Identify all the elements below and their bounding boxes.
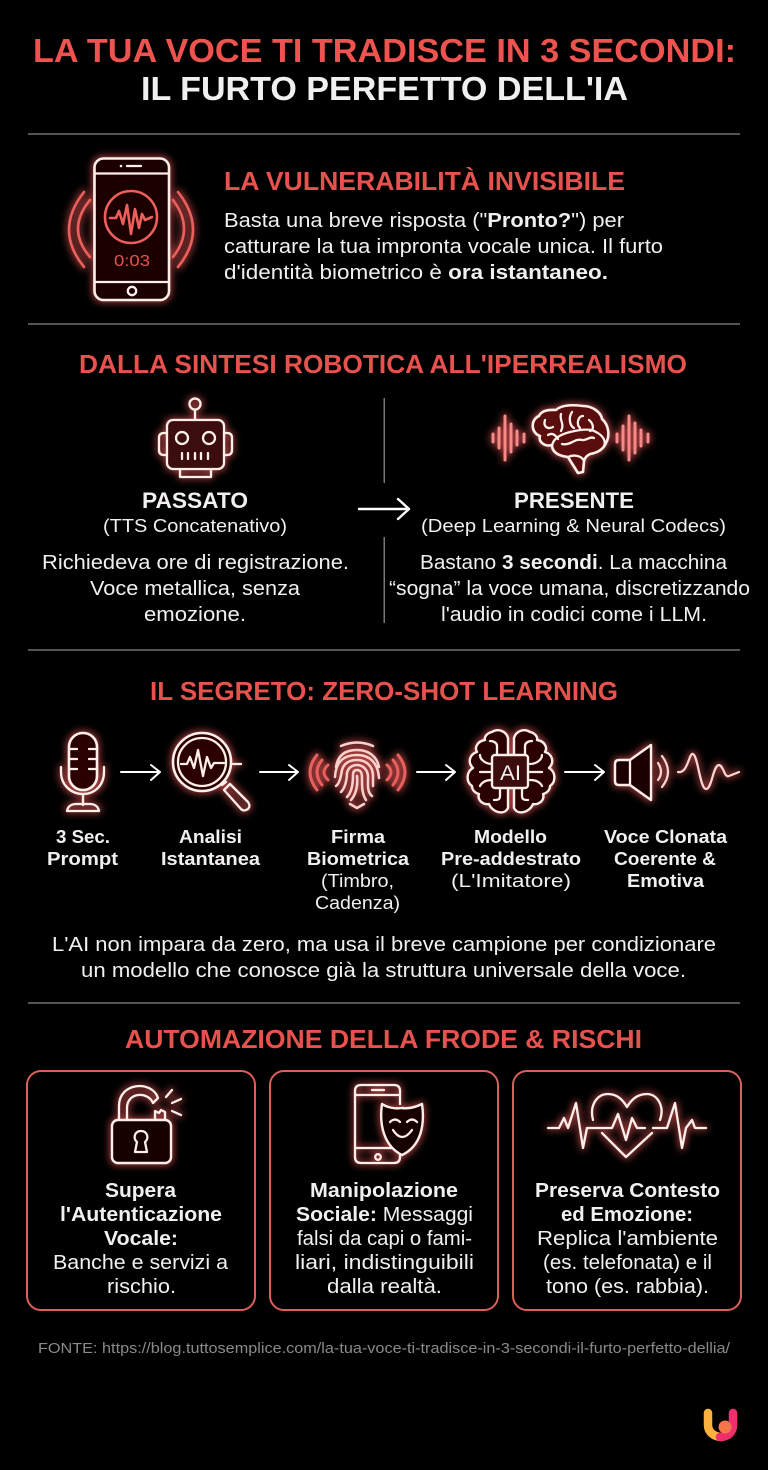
- heading: zero-shot: IL SEGRETO: ZERO-SHOT LEARNING: [150, 676, 618, 706]
- text: vulnerability body: catturare la tua impronta vocale unica. Il furto: [224, 236, 663, 258]
- labels: step 3: Biometrica: [307, 848, 410, 869]
- labels: step 2: Istantanea: [161, 848, 261, 869]
- labels: step 3: [307, 826, 410, 913]
- text: voice authentication: [53, 1180, 229, 1298]
- source line: FONTE: https://blog.tuttosemplice.com/la-tua-voce-ti-tradisce-in-3-secondi-il-furto-perfetto-dellia/: [38, 1340, 731, 1357]
- panel: risks: [27, 1024, 741, 1310]
- labels: step 1: [47, 826, 118, 869]
- text: context and emotion: Preserva Contesto: [535, 1180, 720, 1202]
- text: voice authentication: Supera: [105, 1180, 177, 1202]
- labels: step 1: 3 Sec.: [56, 826, 110, 847]
- text: social manipulation: Sociale: Messaggi: [296, 1204, 473, 1226]
- panel: zero-shot learning: [47, 676, 739, 982]
- text: past: emozione.: [144, 604, 246, 626]
- icon: phone recording: 0:03: [114, 253, 150, 270]
- text: context and emotion: [535, 1180, 720, 1298]
- labels: step 2: [161, 826, 261, 869]
- text: past: [42, 488, 349, 626]
- labels: step 2: Analisi: [179, 826, 242, 847]
- text: voice authentication: rischio.: [107, 1276, 176, 1298]
- labels: step 1: Prompt: [47, 848, 118, 869]
- panel: vulnerability: [69, 158, 663, 300]
- arrow: step 2: [260, 765, 298, 780]
- text: explanation: un modello che conosce già la struttura universale della voce.: [81, 960, 686, 982]
- text: explanation: [52, 934, 716, 982]
- text: past: Richiedeva ore di registrazione.: [42, 552, 349, 574]
- text: present: Bastano 3 secondi. La macchina: [420, 552, 728, 574]
- heading: vulnerability: LA VULNERABILITÀ INVISIBILE: [224, 166, 625, 196]
- text: present: “sogna” la voce umana, discretizzando: [389, 578, 750, 600]
- text: voice authentication: Vocale:: [104, 1228, 178, 1250]
- text: vulnerability body: Basta una breve risposta (" Pronto? ") per: [224, 210, 624, 232]
- icon: heart pulse: [548, 1094, 706, 1157]
- heading: risks: AUTOMAZIONE DELLA FRODE & RISCHI: [125, 1024, 642, 1054]
- icon: fingerprint: [310, 742, 405, 808]
- text: voice authentication: l'Autenticazione: [60, 1204, 222, 1226]
- divider: vertical bottom: [384, 537, 385, 623]
- icon: robot: [159, 398, 232, 477]
- card: social manipulation: [270, 1071, 498, 1310]
- text: past: Voce metallica, senza: [90, 578, 301, 600]
- arrow: step 1: [121, 765, 160, 780]
- text: explanation: L'AI non impara da zero, ma usa il breve campione per condizionare: [52, 934, 716, 956]
- icon: brain with waves: [493, 405, 648, 473]
- text: present: (Deep Learning & Neural Codecs): [421, 515, 726, 536]
- title: IL FURTO PERFETTO DELL'IA: [141, 70, 628, 107]
- labels: step 4: Modello: [474, 826, 547, 847]
- icon: speaker with wave: [615, 745, 739, 800]
- text: vulnerability body: d'identità biometrico è ora istantaneo.: [224, 262, 608, 284]
- labels: step 4: Pre-addestrato: [441, 848, 581, 869]
- icon: magnifier: [173, 733, 250, 810]
- labels: step 3: (Timbro,: [321, 870, 394, 891]
- text: context and emotion: (es. telefonata) e il: [543, 1252, 712, 1274]
- logo: [708, 1413, 733, 1437]
- icon: AI brain: AI: [500, 762, 521, 785]
- labels: step 4: (L'Imitatore): [451, 870, 571, 891]
- text: context and emotion: ed Emozione:: [561, 1204, 693, 1226]
- text: present: l'audio in codici come i LLM.: [441, 604, 707, 626]
- labels: step 5: Voce Clonata: [604, 826, 728, 847]
- divider: vertical top: [384, 398, 385, 483]
- text: past: PASSATO: [142, 488, 248, 513]
- text: present: [389, 488, 750, 626]
- text: context and emotion: Replica l'ambiente: [537, 1228, 718, 1250]
- panel: evolution: [42, 349, 750, 626]
- labels: step 5: Coerente &: [614, 848, 716, 869]
- icon: AI brain: [468, 730, 554, 812]
- title: LA TUA VOCE TI TRADISCE IN 3 SECONDI:: [33, 32, 736, 69]
- icon: microphone: [61, 733, 104, 811]
- labels: step 4: [441, 826, 581, 891]
- icon: phone and mask: [355, 1085, 423, 1163]
- heading: evolution: DALLA SINTESI ROBOTICA ALL'IPERREALISMO: [79, 349, 687, 379]
- title: [33, 32, 736, 107]
- card: context and emotion: [513, 1071, 741, 1310]
- text: present: PRESENTE: [514, 488, 634, 513]
- labels: step 5: [604, 826, 728, 891]
- text: context and emotion: tono (es. rabbia).: [546, 1276, 709, 1298]
- card: voice authentication: [27, 1071, 255, 1310]
- text: vulnerability body: [224, 210, 663, 284]
- text: social manipulation: dalla realtà.: [327, 1276, 442, 1298]
- labels: step 3: Cadenza): [315, 892, 400, 913]
- text: social manipulation: falsi da capi o fami-: [297, 1228, 472, 1250]
- text: social manipulation: Manipolazione: [310, 1180, 458, 1202]
- text: social manipulation: [295, 1180, 474, 1298]
- arrow: past to present: [359, 499, 409, 519]
- text: social manipulation: liari, indistinguibili: [295, 1252, 474, 1274]
- text: voice authentication: Banche e servizi a: [53, 1252, 229, 1274]
- labels: step 3: Firma: [331, 826, 386, 847]
- arrow: step 3: [417, 765, 455, 780]
- text: past: (TTS Concatenativo): [103, 515, 287, 536]
- icon: open padlock: [112, 1086, 181, 1163]
- icon: phone recording: [69, 158, 193, 300]
- labels: step 5: Emotiva: [627, 870, 705, 891]
- arrow: step 4: [565, 765, 604, 780]
